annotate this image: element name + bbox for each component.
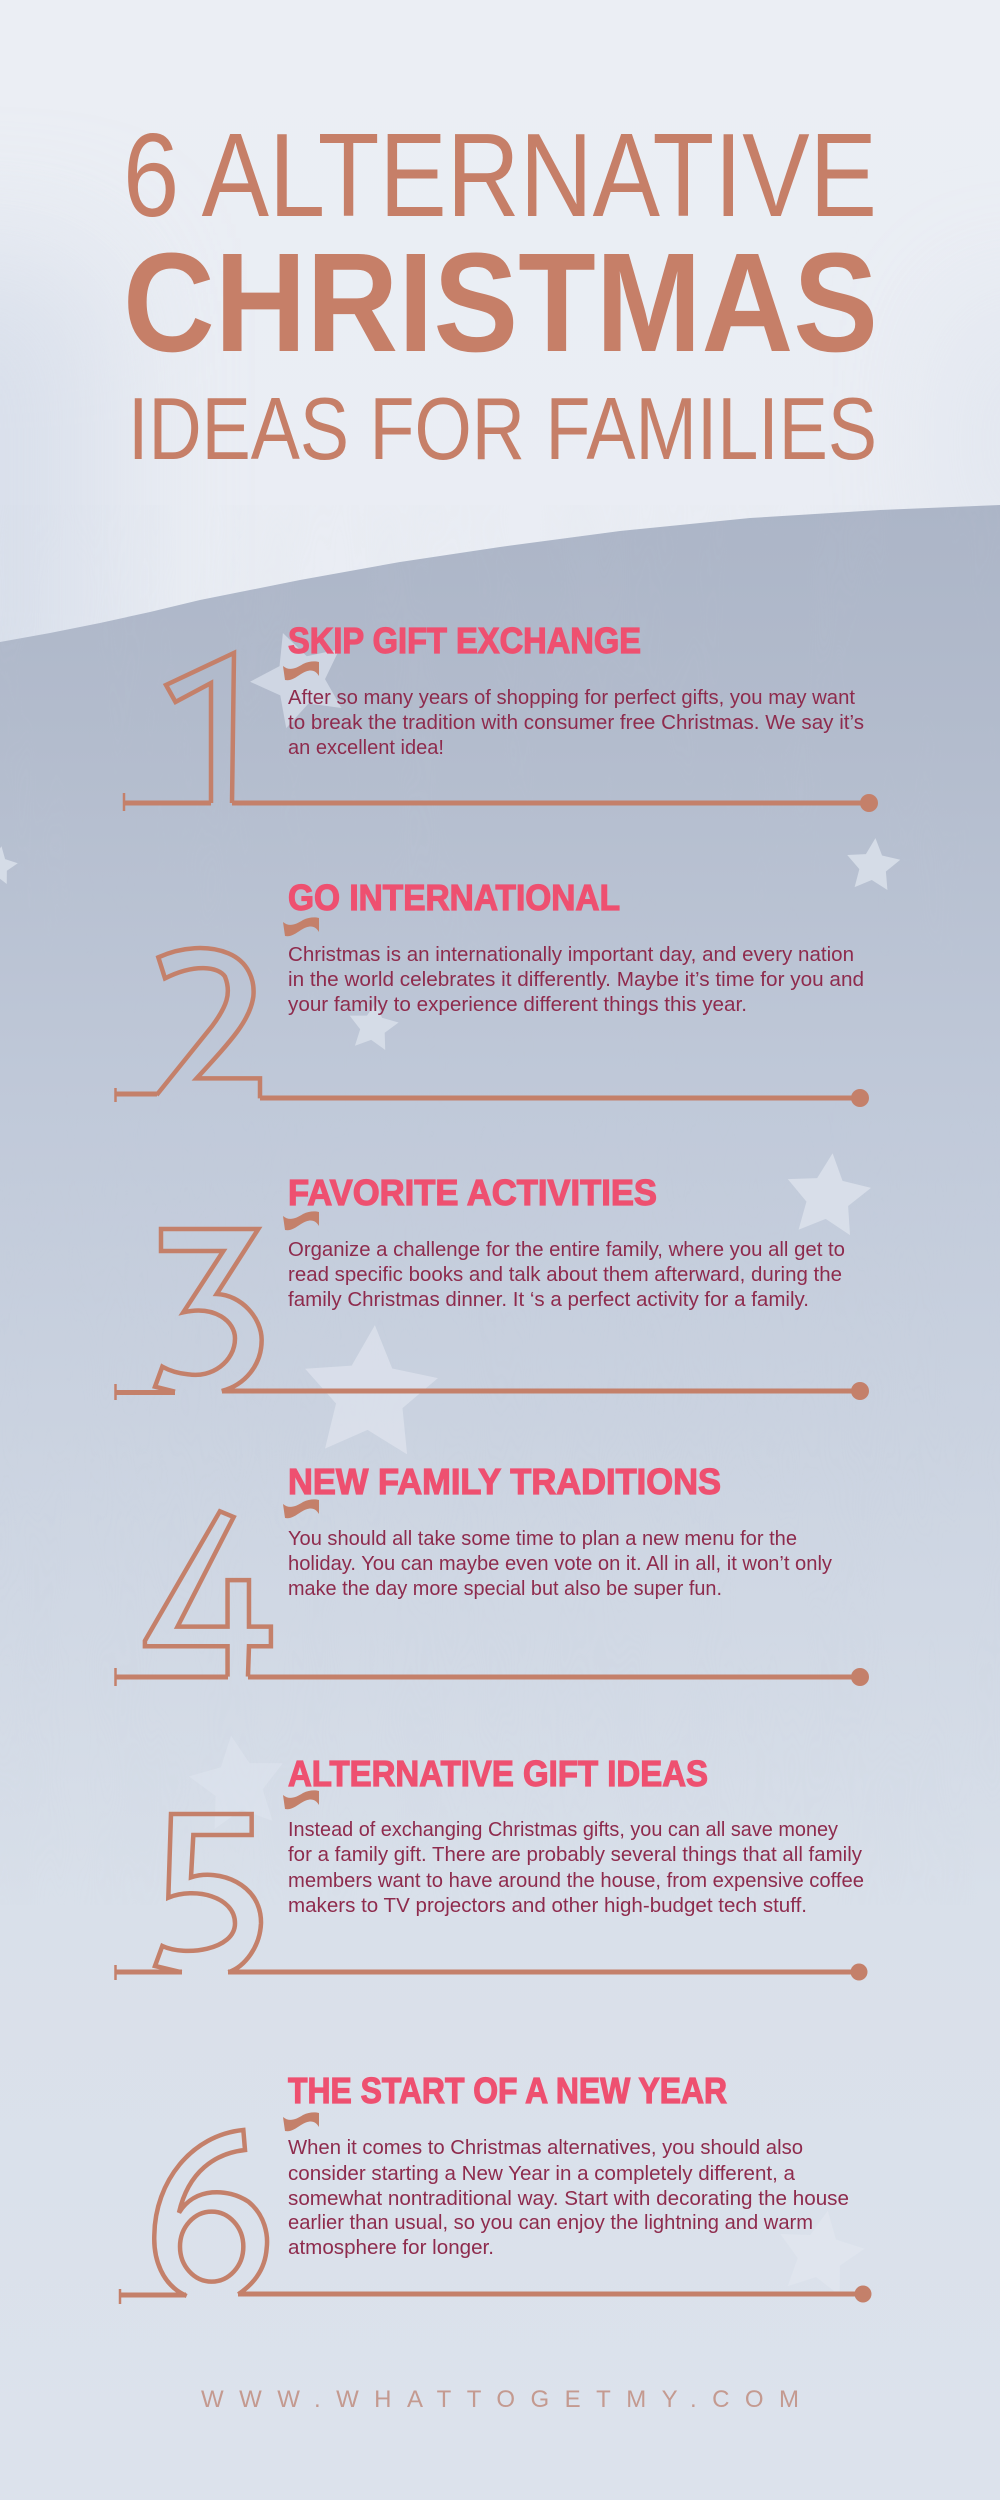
heading: SKIP GIFT EXCHANGE: [288, 620, 641, 661]
body text: consider starting a New Year in a completely different, a: [288, 2162, 796, 2185]
body text: When it comes to Christmas alternatives, you should also: [288, 2136, 803, 2159]
body text: After so many years of shopping for perfect gifts, you may want: [288, 686, 855, 709]
baseline with end dot: [115, 1088, 869, 1107]
title: [123, 109, 878, 478]
squiggle icon: [283, 2112, 319, 2131]
body text: [288, 686, 864, 759]
baseline with end dot: [124, 793, 878, 812]
background: soft left edge shading: [0, 260, 100, 780]
body text: makers to TV projectors and other high-budget tech stuff.: [288, 1894, 807, 1917]
heading: THE START OF A NEW YEAR: [288, 2070, 727, 2111]
panel: alternative gift ideas: [115, 1753, 868, 1980]
body text: members want to have around the house, from expensive coffee: [288, 1869, 864, 1892]
body text: Instead of exchanging Christmas gifts, you can all save money: [288, 1818, 839, 1841]
panel: go international: [115, 877, 869, 1107]
body text: [288, 2136, 849, 2259]
number 2 outline: [157, 948, 260, 1098]
body text: in the world celebrates it differently. Maybe it’s time for you and: [288, 968, 864, 991]
number 6 outline: [154, 2130, 267, 2296]
body text: your family to experience different things this year.: [288, 993, 747, 1016]
baseline with end dot: [115, 1668, 869, 1686]
body text: [288, 1527, 833, 1600]
squiggle icon: [283, 1499, 319, 1518]
squiggle icon: [283, 661, 319, 680]
body text: for a family gift. There are probably several things that all family: [288, 1843, 863, 1866]
number 1 outline: [166, 653, 234, 803]
footer website: WWW.WHATTOGETMY.COM: [201, 2386, 799, 2413]
number 5 outline: [155, 1814, 261, 1972]
panel: the start of a new year: [120, 2070, 872, 2304]
baseline with end dot: [120, 2286, 872, 2304]
squiggle icon: [283, 917, 319, 936]
body text: [288, 1238, 845, 1311]
number 3 outline: [155, 1229, 262, 1392]
decorative stars: [0, 617, 902, 2298]
body text: to break the tradition with consumer free Christmas. We say it’s: [288, 711, 864, 734]
body text: Organize a challenge for the entire family, where you all get to: [288, 1238, 845, 1261]
background: soft right edge shading: [960, 300, 1000, 580]
body text: [288, 943, 864, 1016]
title line: Christmas: CHRISTMAS: [123, 223, 878, 381]
title line: 6 Alternative: 6 ALTERNATIVE: [123, 109, 877, 242]
background: watercolor texture: [0, 505, 1000, 1905]
squiggle icon: [283, 1211, 319, 1230]
body text: somewhat nontraditional way. Start with decorating the house: [288, 2187, 849, 2210]
body text: holiday. You can maybe even vote on it. All in all, it won’t only: [288, 1552, 833, 1575]
body text: Christmas is an internationally important day, and every nation: [288, 943, 854, 966]
body text: atmosphere for longer.: [288, 2236, 494, 2259]
body text: earlier than usual, so you can enjoy the lightning and warm: [288, 2211, 813, 2234]
heading: NEW FAMILY TRADITIONS: [288, 1461, 721, 1502]
heading: ALTERNATIVE GIFT IDEAS: [288, 1753, 708, 1794]
heading: GO INTERNATIONAL: [288, 877, 620, 918]
panel: skip gift exchange: [124, 620, 878, 812]
body text: an excellent idea!: [288, 736, 444, 759]
panel: favorite activities: [115, 1172, 869, 1400]
panel: new family traditions: [115, 1461, 869, 1686]
heading: FAVORITE ACTIVITIES: [288, 1172, 657, 1213]
baseline with end dot: [115, 1382, 869, 1400]
body text: family Christmas dinner. It ‘s a perfect activity for a family.: [288, 1288, 809, 1311]
body text: You should all take some time to plan a new menu for the: [288, 1527, 797, 1550]
body text: read specific books and talk about them afterward, during the: [288, 1263, 842, 1286]
body text: make the day more special but also be super fun.: [288, 1577, 722, 1600]
squiggle icon: [283, 1790, 319, 1809]
number 4 outline: [145, 1511, 271, 1677]
body text: [288, 1818, 864, 1917]
baseline with end dot: [115, 1964, 868, 1980]
background: darker torn-edge lower panel: [0, 505, 1000, 2500]
